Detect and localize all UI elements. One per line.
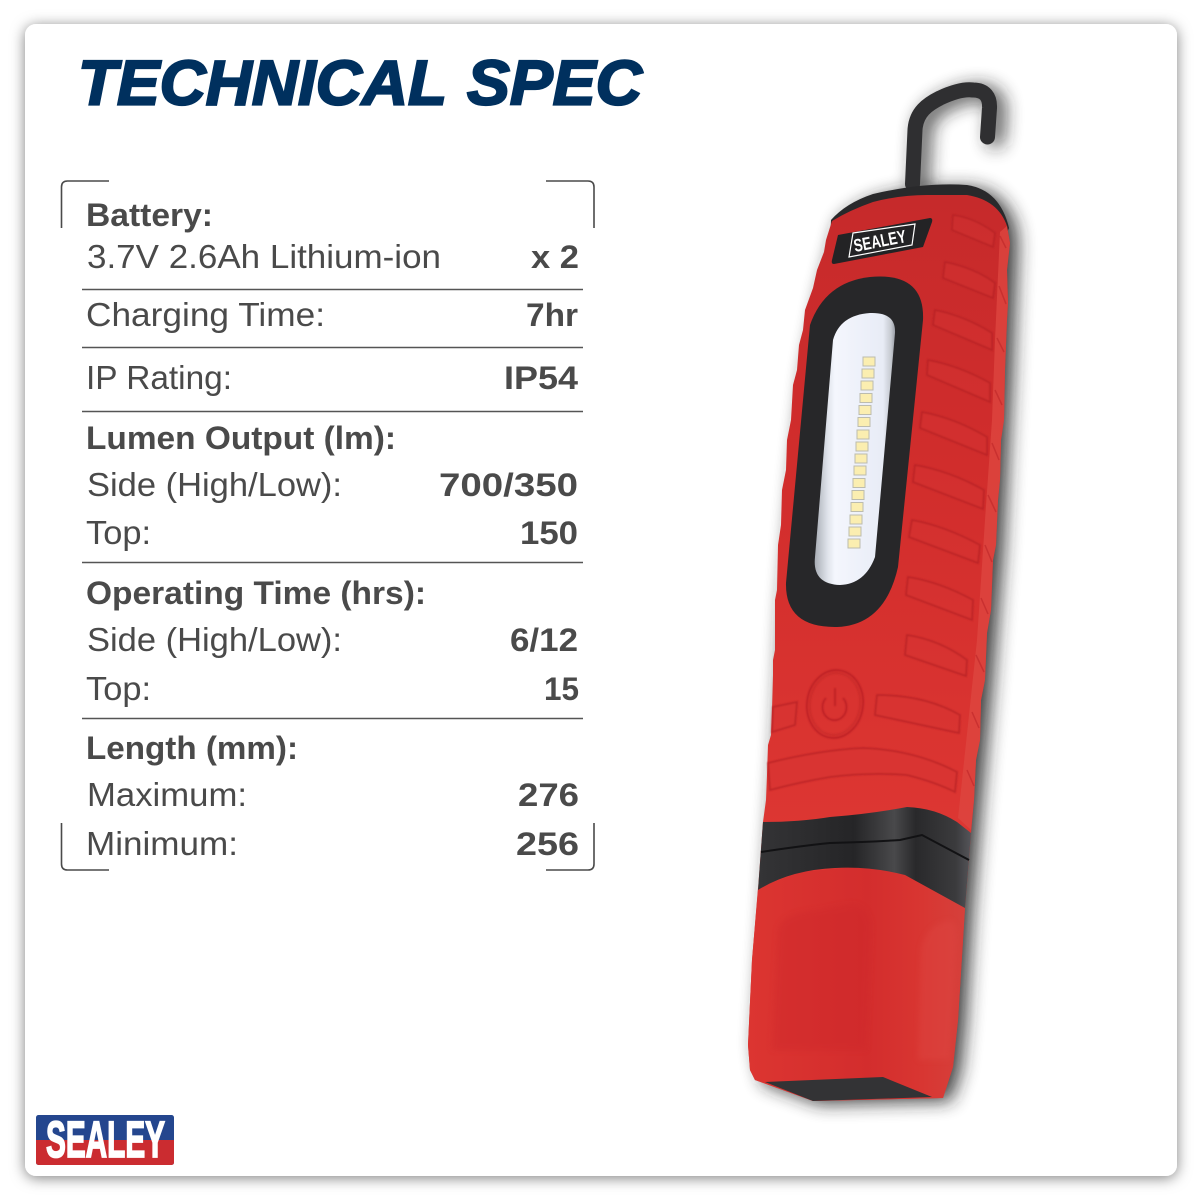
row: lumen output: Side (High/Low): [87, 466, 342, 503]
row: operating time: Operating Time (hrs): [86, 575, 426, 611]
torch logo plate [832, 218, 932, 264]
row: operating time: 15 [544, 671, 579, 707]
row: charging time [86, 296, 578, 333]
torch main body [748, 195, 1010, 1101]
table dividers [82, 290, 583, 718]
row: operating time: 6/12 [510, 622, 578, 658]
row: lumen output [86, 420, 578, 551]
row: battery: Battery: [86, 197, 213, 233]
torch top cap [830, 184, 1009, 250]
torch body ribs [768, 215, 995, 792]
torch base recessed panels [772, 904, 957, 1060]
title: SPEC [467, 48, 644, 118]
row: length [86, 730, 579, 862]
row: length: Length (mm): [86, 730, 298, 766]
logo: Sealey brand [36, 1111, 174, 1168]
torch lens [815, 313, 895, 585]
title [78, 48, 644, 118]
torch logo plate: SEALEY [852, 226, 908, 256]
torch hook [912, 90, 990, 184]
row: length: Maximum: [87, 776, 247, 813]
torch black band [758, 807, 971, 908]
row: IP rating: IP Rating: [86, 359, 232, 396]
torch base end face [765, 1077, 932, 1101]
row: charging time: Charging Time: [86, 296, 325, 333]
row: lumen output: 700/350 [439, 467, 578, 503]
row: charging time: 7hr [526, 297, 578, 333]
torch side notches [967, 236, 1006, 786]
torch band seam [761, 835, 969, 860]
corner brackets [62, 181, 594, 870]
row: operating time [86, 575, 579, 707]
row: lumen output: 150 [520, 515, 578, 551]
row: battery [86, 197, 579, 275]
torch LED strip [848, 357, 875, 548]
row: lumen output: Lumen Output (lm): [86, 420, 396, 456]
torch side face shade [958, 226, 1010, 830]
panel: specification table [62, 181, 594, 870]
row: battery: 3.7V 2.6Ah Lithium-ion [87, 238, 441, 275]
row: IP rating [86, 359, 578, 396]
row: operating time: Side (High/Low): [87, 621, 342, 658]
row: IP rating: IP54 [504, 360, 578, 396]
torch lamp surround [786, 277, 923, 627]
row: length: Minimum: [86, 825, 238, 862]
row: length: 276 [518, 777, 579, 813]
torch lower battery base [748, 866, 965, 1101]
row: battery: x 2 [531, 239, 579, 275]
icon: inspection light product [748, 90, 1018, 1104]
title: TECHNICAL [78, 48, 447, 118]
row: lumen output: Top: [86, 514, 151, 551]
torch cast shadow [756, 93, 1018, 1104]
torch power button [803, 666, 867, 742]
row: length: 256 [516, 826, 579, 862]
logo: Sealey brand: SEALEY [46, 1111, 165, 1168]
row: operating time: Top: [86, 670, 151, 707]
